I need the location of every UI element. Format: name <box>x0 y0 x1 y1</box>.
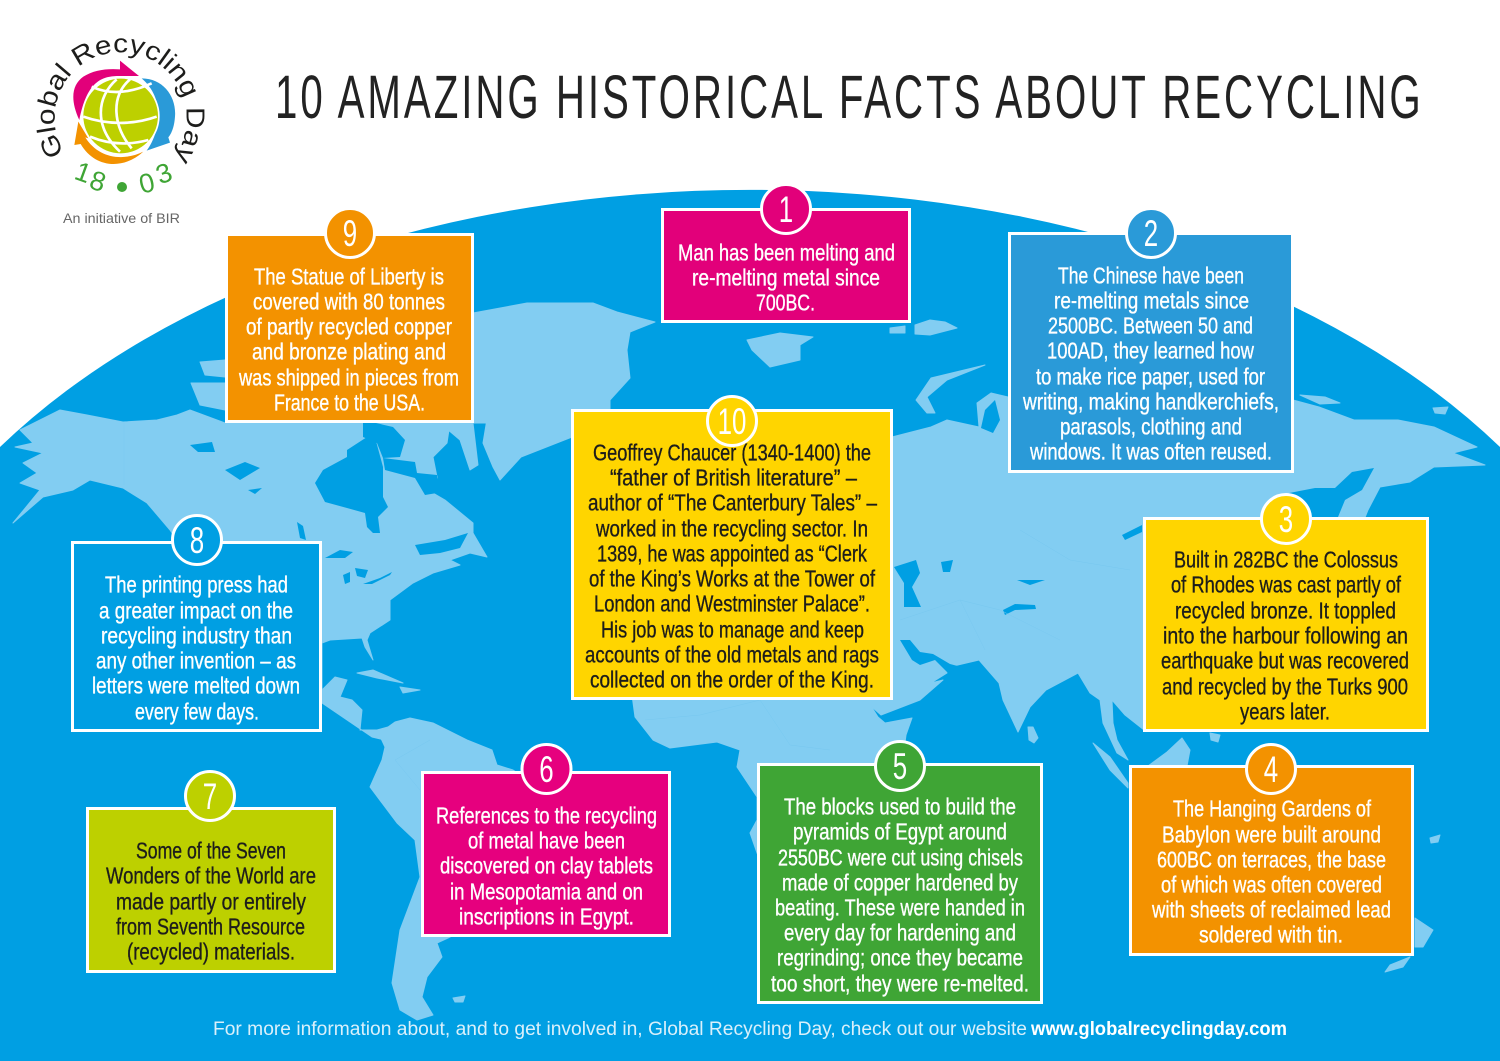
hudson bay <box>315 420 468 555</box>
text: fact 8 <box>92 571 300 724</box>
text: fact 8: letters were melted down <box>92 672 300 698</box>
text: fact 3: Built in 282BC the Colossus <box>1174 546 1398 572</box>
text: fact 3: earthquake but was recovered <box>1161 647 1409 673</box>
badge: number 6: 6 <box>539 748 554 790</box>
logo swirl and globe <box>73 61 175 164</box>
world map <box>13 303 1485 1020</box>
panel: fact 2 <box>1010 208 1292 472</box>
south america <box>370 718 560 1020</box>
text: fact 9: and bronze plating and <box>252 338 446 364</box>
text: fact 8: recycling industry than <box>101 622 292 648</box>
svalbard and arctic islands <box>747 333 985 413</box>
panel: fact 10 <box>572 396 892 698</box>
text: fact 4: 600BC on terraces, the base <box>1157 846 1386 872</box>
text: fact 10: author of “The Canterbury Tales” – <box>588 489 878 515</box>
logo: Global Recycling Day: Global Recycling Day <box>36 38 204 164</box>
badge: number 4: 4 <box>1264 748 1278 790</box>
text: fact 8: a greater impact on the <box>99 597 293 623</box>
text: fact 1 <box>678 239 895 315</box>
logo: Global Recycling Day <box>36 38 204 226</box>
text: fact 1: Man has been melting and <box>678 239 895 265</box>
panel: fact 8 <box>72 516 320 730</box>
badge: number 2 <box>1126 208 1176 258</box>
text: fact 4: with sheets of reclaimed lead <box>1151 896 1391 922</box>
text: fact 8: any other invention – as <box>96 647 296 673</box>
badge: number 3: 3 <box>1279 498 1293 540</box>
text: fact 6: of metal have been <box>468 827 625 853</box>
panel: fact 9 <box>226 208 472 422</box>
text: fact 5: every day for hardening and <box>784 919 1016 945</box>
text: fact 8: every few days. <box>135 698 259 724</box>
text: fact 10 <box>585 439 879 692</box>
text: fact 10: His job was to manage and keep <box>601 616 864 642</box>
text: fact 4: soldered with tin. <box>1199 921 1343 947</box>
panel: fact 4 <box>1130 744 1412 954</box>
badge: number 10: 10 <box>718 400 746 442</box>
text: fact 5: made of copper hardened by <box>782 869 1018 895</box>
text: fact 4 <box>1151 795 1391 947</box>
text: fact 2: The Chinese have been <box>1058 262 1244 288</box>
text: fact 10: London and Westminster Palace”. <box>594 590 870 616</box>
text: fact 2: re-melting metals since <box>1054 287 1249 313</box>
text: fact 7: Wonders of the World are <box>106 862 316 888</box>
panel: fact 3 <box>1144 494 1428 730</box>
text: fact 2: writing, making handkerchiefs, <box>1022 388 1279 414</box>
inner seas <box>894 400 1374 672</box>
badge: number 4 <box>1246 744 1296 794</box>
text: fact 5: beating. These were handed in <box>775 894 1025 920</box>
text: fact 10: 1389, he was appointed as “Clerk <box>597 540 867 566</box>
badge: number 7: 7 <box>203 775 217 817</box>
badge: number 7 <box>186 772 234 820</box>
text: fact 4: The Hanging Gardens of <box>1173 795 1371 821</box>
text: fact 8: The printing press had <box>105 571 288 597</box>
badge: number 8 <box>172 516 222 564</box>
eurasia <box>860 390 1485 760</box>
text: fact 10: worked in the recycling sector. In <box>595 515 868 541</box>
footer: For more information about, and to get involved in, Global Recycling Day, check out our website <box>213 1019 1027 1040</box>
text: fact 2: to make rice paper, used for <box>1036 363 1265 389</box>
text: fact 2: windows. It was often reused. <box>1029 438 1272 464</box>
text: fact 2: parasols, clothing and <box>1060 413 1242 439</box>
text: fact 2 <box>1022 262 1279 464</box>
text: fact 3: of Rhodes was cast partly of <box>1171 571 1401 597</box>
badge: number 3 <box>1262 494 1310 544</box>
text: fact 5: regrinding; once they became <box>777 944 1023 970</box>
badge: number 2: 2 <box>1144 212 1158 254</box>
greenland <box>473 303 655 480</box>
text: fact 9: The Statue of Liberty is <box>254 263 444 289</box>
text: fact 2: 2500BC. Between 50 and <box>1048 312 1253 338</box>
text: fact 7: from Seventh Resource <box>116 913 305 939</box>
footer: www.globalrecyclingday.com <box>1030 1019 1287 1040</box>
text: fact 3 <box>1161 546 1409 724</box>
text: fact 5 <box>771 793 1029 996</box>
text: fact 9: was shipped in pieces from <box>238 364 459 390</box>
text: fact 10: “father of British literature” – <box>610 464 858 490</box>
badge: number 8: 8 <box>190 519 204 561</box>
text: fact 4: of which was often covered <box>1161 871 1382 897</box>
text: fact 5: 2550BC were cut using chisels <box>778 844 1023 870</box>
text: fact 6: References to the recycling <box>436 802 657 828</box>
text: fact 6 <box>436 802 657 929</box>
text: fact 9: of partly recycled copper <box>246 313 452 339</box>
text: fact 2: 100AD, they learned how <box>1047 337 1255 363</box>
text: fact 3: into the harbour following an <box>1163 622 1408 648</box>
logo date 18.03: 8 <box>86 165 110 198</box>
logo date 18.03: 1 <box>71 156 95 189</box>
badge: number 9: 9 <box>343 212 357 254</box>
panel: fact 7 <box>88 772 334 972</box>
text: fact 7 <box>106 837 316 964</box>
text: fact 10: collected on the order of the King. <box>590 666 874 692</box>
africa <box>632 695 912 960</box>
text: fact 7: (recycled) materials. <box>127 938 295 964</box>
text: fact 9: covered with 80 tonnes <box>253 288 445 314</box>
text: fact 3: recycled bronze. It toppled <box>1175 597 1396 623</box>
text: fact 7: Some of the Seven <box>136 837 286 863</box>
badge: number 5: 5 <box>893 745 907 787</box>
badge: number 1: 1 <box>779 188 793 230</box>
logo date 18.03: 3 <box>152 157 176 190</box>
text: fact 1: 700BC. <box>756 289 815 315</box>
text: fact 10: Geoffrey Chaucer (1340-1400) the <box>593 439 871 465</box>
text: fact 6: discovered on clay tablets <box>440 852 653 878</box>
logo date 18.03: 0 <box>136 167 158 200</box>
panel: fact 5 <box>758 742 1042 1002</box>
caribbean and southeast asia islands <box>357 670 1440 1002</box>
text: fact 4: Babylon were built around <box>1162 821 1381 847</box>
badge: number 10 <box>708 396 756 446</box>
badge: number 9 <box>326 208 374 258</box>
text: fact 10: accounts of the old metals and rags <box>585 641 879 667</box>
logo ring text <box>55 52 187 157</box>
text: fact 10: of the King’s Works at the Tower of <box>589 565 875 591</box>
panel: fact 1 <box>662 184 910 322</box>
text: fact 9: France to the USA. <box>274 389 425 415</box>
text: fact 7: made partly or entirely <box>116 888 306 914</box>
title: 10 AMAZING HISTORICAL FACTS ABOUT RECYCLING <box>275 63 1421 131</box>
badge: number 6 <box>522 744 571 794</box>
text: fact 6: in Mesopotamia and on <box>450 878 643 904</box>
text: fact 1: re-melting metal since <box>692 264 880 290</box>
badge: number 5 <box>876 742 924 790</box>
text: fact 3: and recycled by the Turks 900 <box>1162 673 1408 699</box>
text: fact 5: The blocks used to build the <box>784 793 1016 819</box>
panel: fact 6 <box>422 744 670 936</box>
badge: number 1 <box>762 184 810 234</box>
logo caption: An initiative of BIR <box>63 210 180 226</box>
lakes <box>190 442 392 584</box>
text: fact 9 <box>238 263 459 415</box>
text: fact 6: inscriptions in Egypt. <box>459 903 634 929</box>
text: fact 5: too short, they were re-melted. <box>771 970 1029 996</box>
text: fact 5: pyramids of Egypt around <box>793 818 1007 844</box>
logo date 18.03 <box>71 156 176 200</box>
text: fact 3: years later. <box>1240 698 1330 724</box>
